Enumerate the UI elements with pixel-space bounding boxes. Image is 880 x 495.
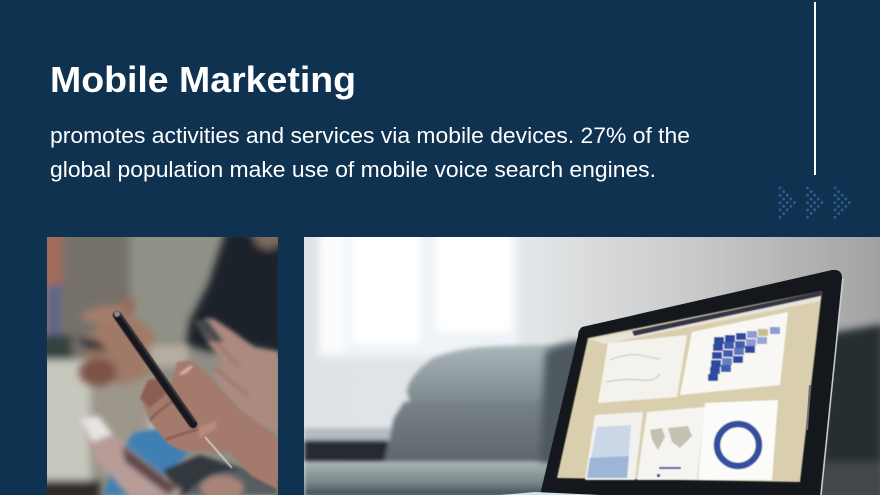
sofa bbox=[304, 344, 590, 495]
title: Mobile Marketing bbox=[50, 59, 356, 100]
main hand bbox=[140, 360, 278, 490]
blurred left hand bbox=[76, 298, 188, 386]
donut card bbox=[698, 400, 778, 480]
line chart card bbox=[598, 335, 687, 403]
dark jacket bbox=[186, 230, 285, 355]
black smartphone bbox=[114, 311, 232, 468]
body text: global population make use of mobile voice search engines. bbox=[50, 157, 656, 182]
heatmap card bbox=[680, 312, 788, 395]
vertical divider line bbox=[814, 2, 816, 175]
laptop bezel bbox=[540, 270, 842, 495]
photo: hands holding smartphones bbox=[40, 230, 285, 495]
blurred foreground phone bbox=[80, 415, 244, 495]
laptop screen bbox=[557, 291, 822, 482]
photo: laptop with analytics dashboard on a sofa bbox=[304, 232, 880, 495]
jeans bbox=[103, 428, 278, 495]
window bbox=[318, 232, 518, 358]
sofa arm behind laptop and dark sofa on right bbox=[540, 324, 880, 495]
map card bbox=[637, 407, 705, 480]
right hand bbox=[193, 318, 278, 432]
body text bbox=[50, 123, 690, 182]
body text: promotes activities and services via mobile devices. 27% of the bbox=[50, 123, 690, 148]
laptop bbox=[500, 270, 843, 495]
table card bbox=[585, 412, 643, 480]
icon: dotted arrows bbox=[778, 186, 851, 219]
